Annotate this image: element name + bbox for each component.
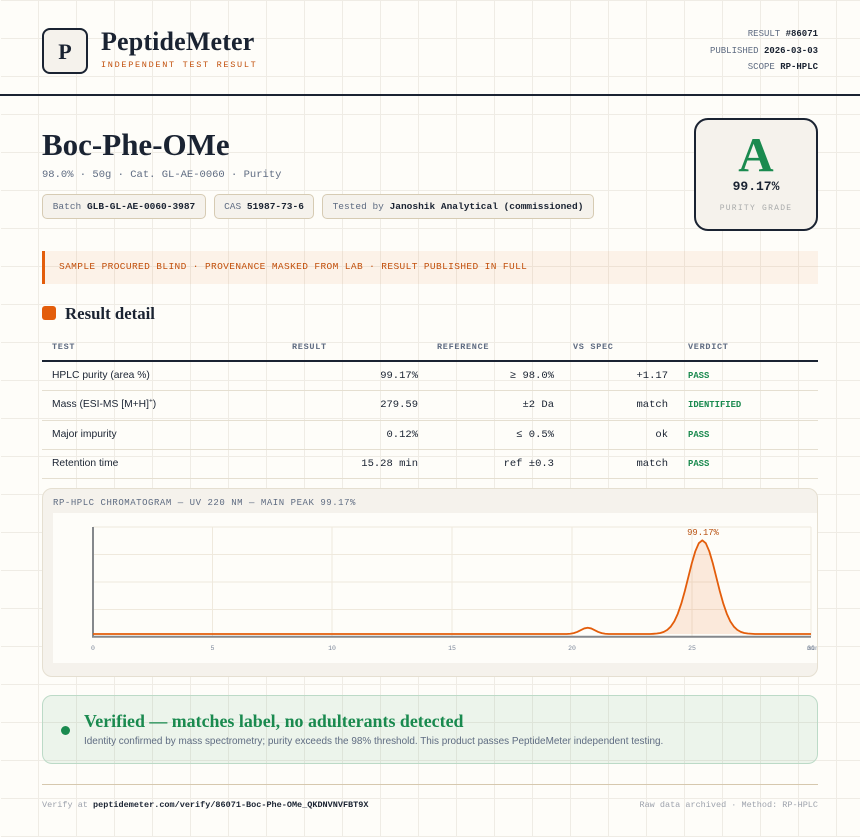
header rule	[0, 94, 860, 96]
grade card	[694, 118, 818, 231]
row: retention time: match	[636, 458, 668, 470]
verified heading: Verified — matches label, no adulterants detected	[84, 711, 463, 731]
header: result metadata	[710, 29, 818, 72]
chip: batch	[42, 194, 206, 219]
row: major impurity: 0.12%	[386, 429, 418, 441]
row: retention time: 15.28 min	[361, 458, 418, 470]
axes	[92, 527, 811, 637]
row: mass: match	[636, 399, 668, 411]
chromatogram chart	[53, 513, 817, 663]
grade percentage: 99.17%	[733, 179, 779, 194]
chromatogram trace	[93, 540, 811, 634]
row: major impurity: ≤ 0.5%	[516, 429, 554, 441]
row: mass: ±2 Da	[522, 399, 554, 411]
table header: VERDICT	[688, 342, 729, 352]
row: mass: Mass (ESI-MS [M+H]+)	[52, 398, 156, 410]
results table	[42, 342, 818, 479]
x axis tick labels: 20	[568, 645, 576, 652]
row: retention time: ref ±0.3	[504, 458, 554, 470]
row: retention time: PASS	[688, 459, 709, 469]
row: major impurity: Major impurity	[52, 429, 117, 440]
panel: verified callout	[42, 695, 818, 764]
header: result metadata: RESULT #86071	[748, 29, 818, 39]
row: HPLC purity: +1.17	[636, 370, 668, 382]
table header: VS SPEC	[573, 342, 614, 352]
x axis tick labels	[91, 645, 819, 652]
table header: TEST	[52, 342, 75, 352]
peak fill	[653, 540, 751, 634]
footer rule	[42, 784, 818, 785]
grade caption: PURITY GRADE	[720, 204, 792, 213]
x axis tick labels: 5	[211, 645, 215, 652]
header: result metadata: SCOPE RP-HPLC	[748, 62, 818, 72]
chip: tested by	[322, 194, 594, 219]
row: mass: IDENTIFIED	[688, 400, 741, 410]
row: HPLC purity	[42, 370, 818, 391]
notice banner: SAMPLE PROCURED BLIND · PROVENANCE MASKED FROM LAB · RESULT PUBLISHED IN FULL	[59, 261, 527, 272]
header: brand logo: P	[58, 39, 72, 64]
verified description: Identity confirmed by mass spectrometry; purity exceeds the 98% threshold. This product passes PeptideMeter independent testing.	[84, 736, 663, 747]
table header: REFERENCE	[437, 342, 489, 352]
header: tagline: INDEPENDENT TEST RESULT	[101, 60, 257, 70]
panel: chromatogram	[42, 488, 818, 677]
row: retention time: Retention time	[52, 458, 118, 469]
row: HPLC purity: HPLC purity (area %)	[52, 370, 150, 381]
row: HPLC purity: 99.17%	[380, 370, 418, 382]
product title: Boc-Phe-OMe	[42, 127, 230, 162]
chip: CAS	[214, 194, 314, 219]
row: retention time	[42, 458, 818, 479]
notice banner	[42, 251, 818, 284]
status dot	[60, 726, 70, 734]
header: brand logo	[42, 28, 88, 74]
row: HPLC purity: PASS	[688, 371, 709, 381]
grade letter: A	[738, 127, 774, 182]
section heading: result detail	[42, 304, 155, 323]
section title: Result detail	[65, 304, 155, 323]
row: major impurity: ok	[655, 429, 668, 441]
chip: batch: Batch GLB-GL-AE-0060-3987	[53, 201, 195, 212]
header: result metadata: PUBLISHED 2026-03-03	[710, 46, 818, 56]
row: major impurity	[42, 429, 818, 450]
peak label: 99.17%	[687, 528, 720, 538]
chip: tested by: Tested by Janoshik Analytical (commissioned)	[333, 201, 583, 212]
header: brand name: PeptideMeter	[101, 27, 254, 56]
x axis tick labels: 15	[448, 645, 456, 652]
footer: verify link: Verify at peptidemeter.com/verify/86071-Boc-Phe-OMe_QKDNVNVFBT9X	[42, 800, 368, 810]
row: HPLC purity: ≥ 98.0%	[510, 370, 554, 382]
row: mass	[42, 398, 818, 421]
x axis tick labels: 0	[91, 645, 95, 652]
x axis tick labels: 25	[688, 645, 696, 652]
table header: RESULT	[292, 342, 327, 352]
row: mass: 279.59	[380, 399, 418, 411]
product subtitle: 98.0% · 50g · Cat. GL-AE-0060 · Purity	[42, 169, 281, 181]
chip: CAS: CAS 51987-73-6	[224, 201, 304, 212]
row: major impurity: PASS	[688, 430, 709, 440]
x axis tick labels: 30	[807, 645, 815, 652]
chart title: RP-HPLC CHROMATOGRAM — UV 220 NM — MAIN PEAK 99.17%	[53, 498, 356, 508]
footer: method note: Raw data archived · Method: RP-HPLC	[639, 800, 818, 810]
section marker	[42, 306, 56, 320]
table header	[42, 342, 818, 362]
x axis tick labels: 10	[328, 645, 336, 652]
